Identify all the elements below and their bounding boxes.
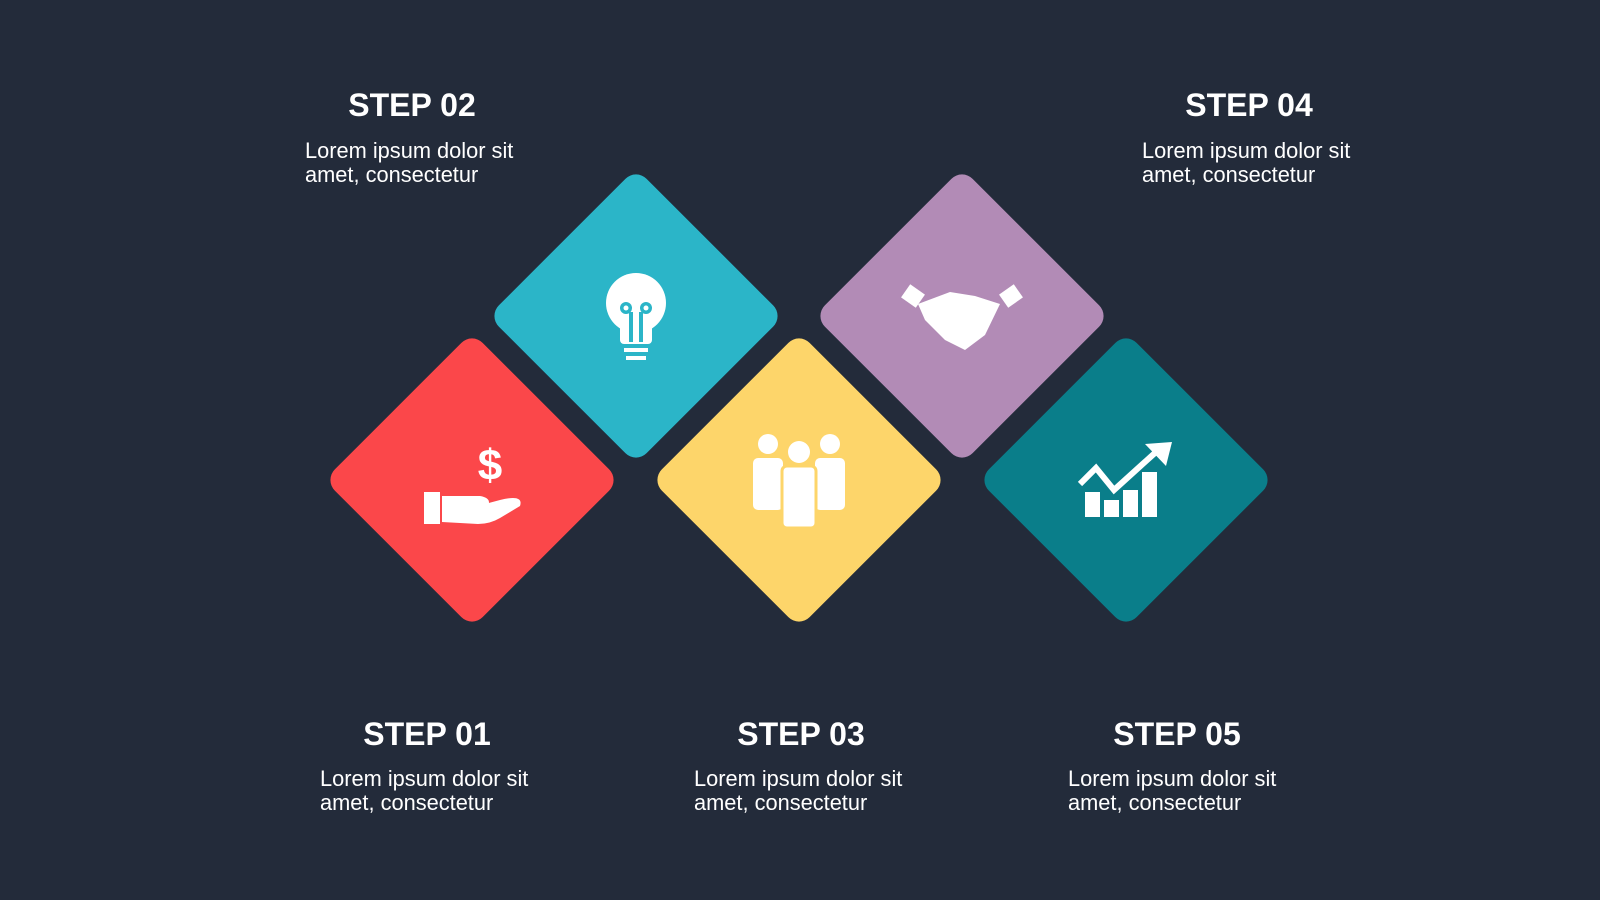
text: step 01: STEP 01 bbox=[363, 716, 491, 752]
text: step 03: STEP 03 bbox=[737, 716, 865, 752]
diamond: step 03 yellow bbox=[651, 332, 947, 628]
icon: hand with dollar: $ bbox=[478, 441, 502, 490]
text: step 01: amet, consectetur bbox=[320, 790, 493, 815]
icon: team bbox=[753, 434, 845, 528]
icon: lightbulb bbox=[606, 273, 666, 360]
text: step 03 bbox=[694, 716, 902, 815]
icon: handshake bbox=[901, 284, 1023, 350]
text: step 04: amet, consectetur bbox=[1142, 162, 1315, 187]
text: step 04: STEP 04 bbox=[1185, 87, 1313, 123]
text: step 05: Lorem ipsum dolor sit bbox=[1068, 766, 1276, 791]
text: step 05: STEP 05 bbox=[1113, 716, 1241, 752]
text: step 01 bbox=[320, 716, 528, 815]
icon: growth chart bbox=[1080, 442, 1172, 517]
icon: hand with dollar bbox=[424, 441, 521, 524]
diamond: step 05 teal bbox=[978, 332, 1274, 628]
text: step 02 bbox=[305, 87, 513, 187]
text: step 04 bbox=[1142, 87, 1350, 187]
text: step 03: Lorem ipsum dolor sit bbox=[694, 766, 902, 791]
text: step 02: Lorem ipsum dolor sit bbox=[305, 138, 513, 163]
text: step 02: STEP 02 bbox=[348, 87, 476, 123]
text: step 05 bbox=[1068, 716, 1276, 815]
text: step 03: amet, consectetur bbox=[694, 790, 867, 815]
text: step 02: amet, consectetur bbox=[305, 162, 478, 187]
text: step 01: Lorem ipsum dolor sit bbox=[320, 766, 528, 791]
diamond: step 01 red bbox=[324, 332, 620, 628]
diamond: step 02 blue bbox=[488, 168, 784, 464]
text: step 04: Lorem ipsum dolor sit bbox=[1142, 138, 1350, 163]
diamond: step 04 purple bbox=[814, 168, 1110, 464]
text: step 05: amet, consectetur bbox=[1068, 790, 1241, 815]
